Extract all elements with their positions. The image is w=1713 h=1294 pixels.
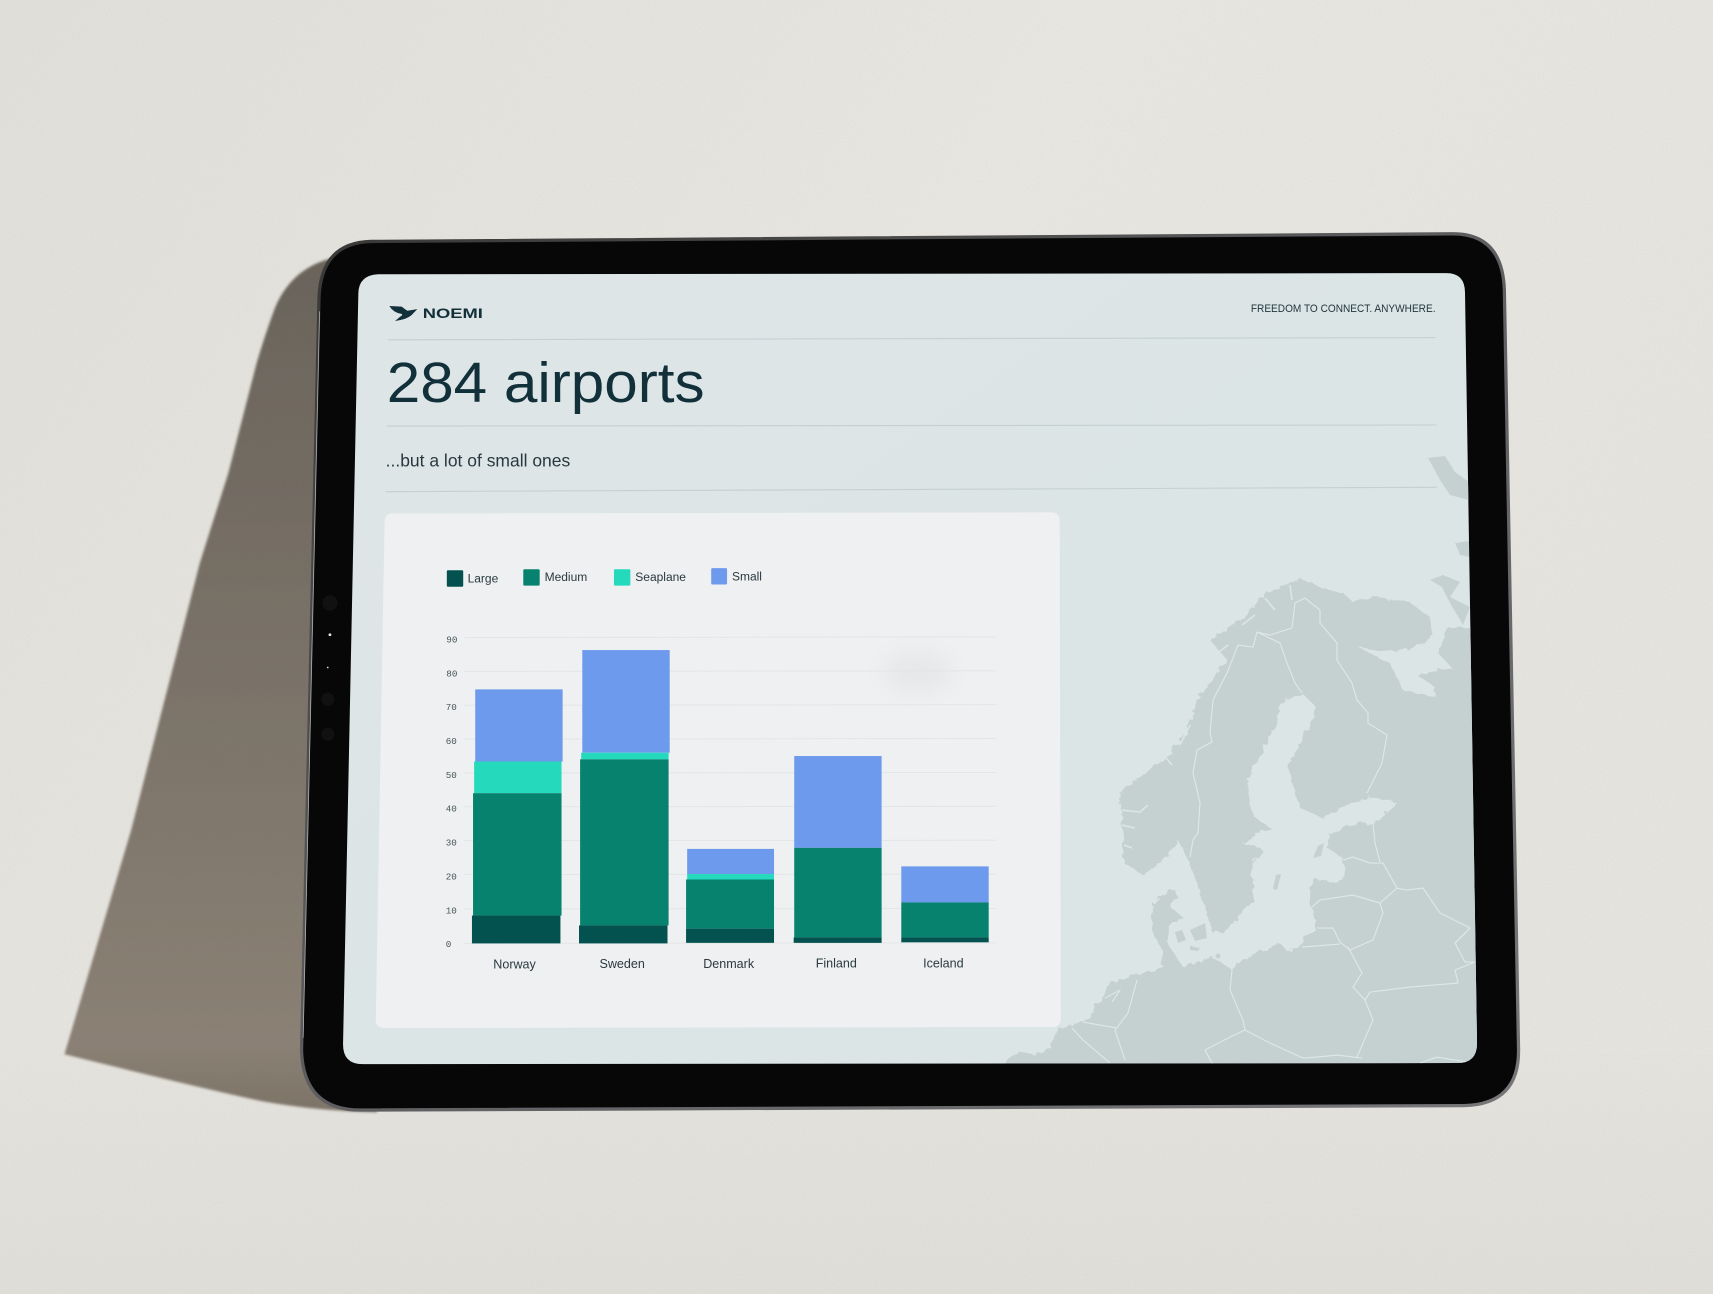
tablet body xyxy=(302,234,1519,1110)
y axis labels: 20 xyxy=(446,871,457,882)
y axis labels: 70 xyxy=(446,702,457,713)
background floor xyxy=(0,1054,1713,1294)
legend xyxy=(447,568,762,587)
legend: Medium xyxy=(523,569,587,586)
y axis labels: 0 xyxy=(446,939,451,950)
y axis labels: 80 xyxy=(446,668,457,679)
legend: Seaplane: Seaplane xyxy=(635,570,686,584)
tablet device xyxy=(302,234,1519,1110)
y axis labels: 50 xyxy=(446,770,457,781)
bars: Sweden xyxy=(579,650,670,943)
brand name: NOEMI xyxy=(423,306,483,321)
x axis labels: Iceland xyxy=(923,956,964,970)
tablet cast shadow xyxy=(64,258,377,1112)
y axis labels: 60 xyxy=(446,736,457,747)
smudge reflections xyxy=(883,650,953,694)
bars: Denmark xyxy=(686,849,774,943)
card background xyxy=(376,512,1061,1028)
header rule lines xyxy=(386,338,1437,492)
y axis labels: 30 xyxy=(446,838,457,849)
map of northern Europe xyxy=(1000,456,1495,1080)
islands xyxy=(1175,456,1470,959)
y axis labels: 40 xyxy=(446,804,457,815)
legend: Seaplane xyxy=(614,569,686,586)
stacked bar chart xyxy=(446,634,996,972)
y axis labels: 90 xyxy=(446,634,457,645)
title: 284 airports xyxy=(387,352,705,415)
x axis labels: Finland xyxy=(816,956,857,970)
icon: bird xyxy=(389,306,417,321)
bars: Iceland xyxy=(901,866,989,942)
x axis labels xyxy=(493,956,964,972)
x axis labels: Norway xyxy=(493,958,537,972)
legend: Small: Small xyxy=(732,570,762,584)
country borders xyxy=(1072,598,1475,1065)
y axis labels: 10 xyxy=(446,905,457,916)
land mass xyxy=(1000,578,1495,1080)
grid lines xyxy=(464,637,996,943)
bars: Norway xyxy=(472,689,563,943)
y axis labels xyxy=(446,634,457,950)
tagline: FREEDOM TO CONNECT. ANYWHERE. xyxy=(1251,303,1436,315)
tablet edge highlight xyxy=(303,311,320,1038)
legend: Small xyxy=(711,568,762,585)
fjord inlets xyxy=(1122,585,1292,848)
legend: Medium: Medium xyxy=(545,570,587,584)
legend: Large: Large xyxy=(468,571,499,585)
screen background xyxy=(343,273,1477,1064)
x axis labels: Denmark xyxy=(703,957,755,971)
subtitle: ...but a lot of small ones xyxy=(386,451,571,471)
tablet side sensors xyxy=(321,595,338,741)
bars: Finland xyxy=(794,756,882,943)
legend: Large xyxy=(447,570,499,587)
x axis labels: Sweden xyxy=(599,957,645,971)
panel: chart card xyxy=(376,512,1061,1028)
logo xyxy=(389,306,483,321)
